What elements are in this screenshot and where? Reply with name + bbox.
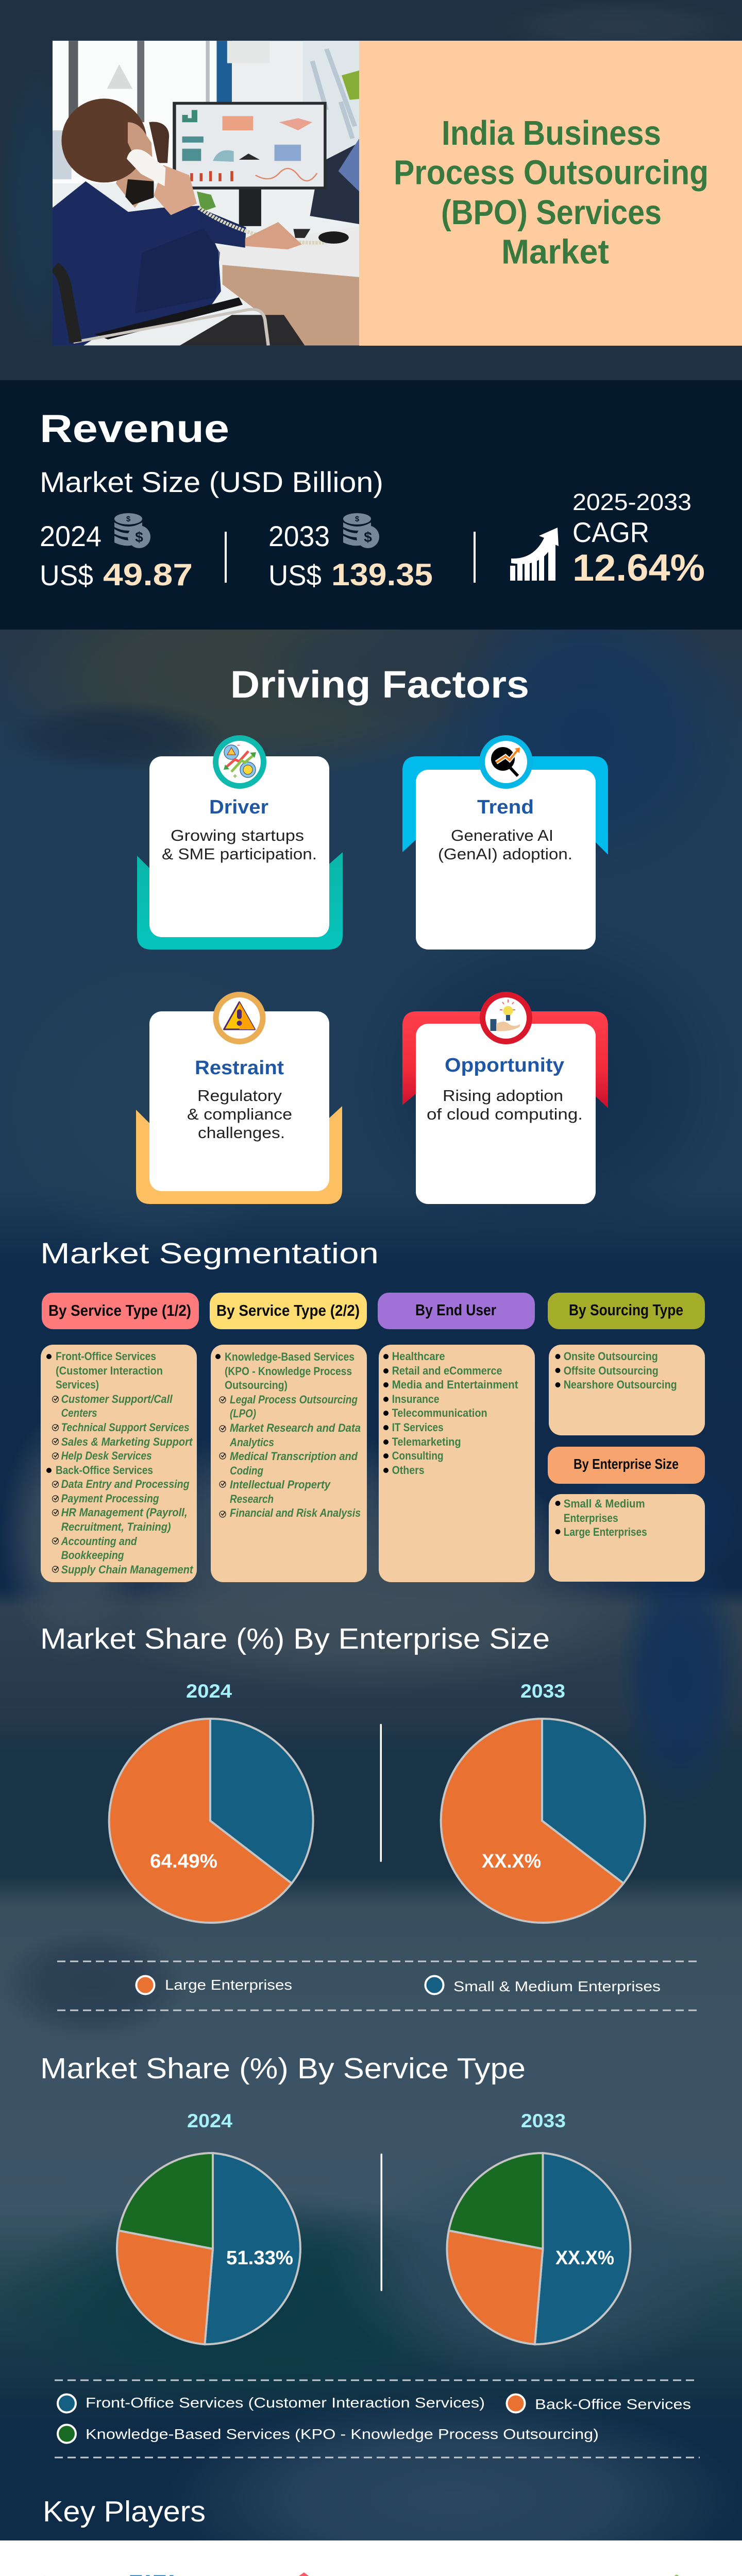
card: opportunity: Rising adoption — [443, 1087, 563, 1105]
segment list: end user: Telemarketing — [392, 1435, 461, 1448]
segment list: service type 1: Back-Office Services — [56, 1464, 153, 1477]
segment list: enterprise size: Large Enterprises — [564, 1526, 647, 1538]
year label 2033: 2033 — [521, 2110, 566, 2131]
segment list: service type 1: Front-Office Services — [56, 1350, 156, 1363]
icon: driver: − — [237, 743, 240, 749]
segment list: service type 2: Legal Process Outsourcing — [230, 1393, 358, 1406]
segment header: service type 1: By Service Type (1/2) — [48, 1301, 191, 1319]
segment list: service type 1: Recruitment, Training) — [61, 1520, 171, 1533]
segment header: end user — [378, 1293, 535, 1329]
card: trend: Trend — [477, 796, 534, 818]
segment list: end user: IT Services — [392, 1421, 444, 1434]
card: opportunity — [402, 992, 608, 1204]
segment list: end user — [379, 1345, 535, 1582]
card: restraint — [136, 992, 342, 1204]
year label 2024: 2024 — [187, 2110, 232, 2131]
title: Process Outsourcing — [394, 154, 709, 192]
segment list: service type 1: Services) — [56, 1378, 99, 1391]
icon: trend — [491, 747, 520, 776]
photo: man on phone at office desk — [53, 41, 359, 348]
segment list: enterprise size: Small & Medium — [564, 1497, 645, 1510]
segment list: end user: Media and Entertainment — [392, 1378, 518, 1391]
stat: 2024: 2024 — [40, 520, 102, 552]
stat: 2033: US$ — [268, 559, 322, 591]
segment list: service type 1: Technical Support Services — [61, 1421, 190, 1434]
segment list: service type 1: Data Entry and Processing — [61, 1478, 190, 1490]
stat: CAGR: CAGR — [572, 516, 649, 548]
segment list: service type 2: Research — [230, 1493, 274, 1505]
panel: market share by enterprise size — [40, 1622, 700, 2010]
stat: 2033: 139.35 — [331, 557, 433, 592]
legend: service type: Front-Office Services (Customer Interaction Services) — [86, 2395, 485, 2411]
legend: service type: Knowledge-Based Services (KPO - Knowledge Process Outsourcing) — [86, 2426, 599, 2442]
segment header: service type 2: By Service Type (2/2) — [216, 1301, 360, 1319]
heading: revenue: Revenue — [40, 407, 229, 451]
segment list: service type 2: Outsourcing) — [225, 1379, 288, 1392]
segment list: end user: Retail and eCommerce — [392, 1364, 502, 1377]
legend: service type: Back-Office Services — [535, 2396, 691, 2412]
icon: coins: $ — [126, 515, 131, 523]
card: trend: (GenAI) adoption. — [438, 845, 572, 863]
icon: coins — [343, 513, 379, 548]
segment list: enterprise size: Enterprises — [564, 1512, 618, 1524]
stat: 2024 — [40, 513, 193, 592]
segment list: service type 1: Accounting and — [61, 1535, 137, 1548]
pie chart: enterprise size 2024 — [109, 1719, 313, 1923]
card: trend — [402, 735, 608, 950]
segment list: service type 1: Help Desk Services — [61, 1449, 152, 1462]
segment list: sourcing type: Onsite Outsourcing — [564, 1350, 658, 1363]
pie chart: service type 2024 — [117, 2153, 300, 2344]
segment list: sourcing type: Offsite Outsourcing — [564, 1364, 659, 1377]
pie chart: enterprise size 2024: 64.49% — [150, 1851, 217, 1872]
stat: CAGR: 12.64% — [572, 547, 705, 589]
segment list: end user: Insurance — [392, 1393, 440, 1405]
year label 2024: 2024 — [186, 1681, 232, 1702]
card: driver: Driver — [209, 796, 268, 818]
segment list: service type 2: Medical Transcription and — [230, 1450, 358, 1463]
segment header: end user: By End User — [415, 1301, 496, 1319]
segment list: sourcing type — [549, 1345, 705, 1435]
card: restraint: Regulatory — [197, 1087, 282, 1105]
segment header: sourcing type: By Sourcing Type — [569, 1301, 683, 1319]
icon: coins — [114, 513, 150, 548]
panel: revenue — [0, 380, 742, 630]
heading: service type share: Market Share (%) By Service Type — [40, 2052, 526, 2085]
panel: hero — [53, 41, 742, 348]
icon: driver: + — [233, 772, 237, 780]
segment list: service type 1 — [41, 1345, 197, 1582]
subheading: market size: Market Size (USD Billion) — [40, 466, 383, 498]
logo: genpact — [284, 2572, 431, 2576]
segment list: service type 1: Customer Support/Call — [61, 1393, 173, 1405]
pie chart: service type 2024: 51.33% — [226, 2247, 293, 2269]
segment list: end user: Telecommunication — [392, 1406, 487, 1419]
legend: enterprise size: Large Enterprises — [165, 1977, 292, 1993]
segment header: enterprise size: By Enterprise Size — [574, 1456, 679, 1472]
segment list: service type 1: Supply Chain Management — [61, 1563, 194, 1576]
segment list: service type 2: (LPO) — [230, 1407, 256, 1420]
panel: key players — [0, 2495, 742, 2576]
title: Market — [501, 233, 609, 272]
card: restraint: & compliance — [187, 1105, 292, 1123]
segment list: service type 1: Payment Processing — [61, 1492, 159, 1505]
icon: growth chart arrow — [510, 528, 559, 581]
heading: enterprise size share: Market Share (%) By Enterprise Size — [40, 1622, 550, 1655]
heading: key players: Key Players — [43, 2495, 206, 2528]
segment list: service type 2: Coding — [230, 1464, 263, 1477]
segment list: service type 1: Centers — [61, 1406, 97, 1419]
title: (BPO) Services — [441, 193, 662, 232]
segment header: sourcing type — [548, 1293, 705, 1329]
stat: 2033: 2033 — [268, 520, 330, 552]
segment list: end user: Consulting — [392, 1449, 444, 1462]
segment list: enterprise size — [549, 1494, 705, 1582]
legend: service type — [58, 2395, 691, 2443]
panel: market segmentation — [40, 1237, 705, 1582]
segment list: service type 2: Knowledge-Based Services — [225, 1350, 355, 1363]
segment list: end user: Healthcare — [392, 1350, 445, 1363]
pie chart: service type 2033: XX.X% — [555, 2247, 614, 2269]
card: driver: & SME participation. — [162, 845, 317, 863]
segment list: service type 1: (Customer Interaction — [56, 1364, 163, 1377]
segment header: service type 2 — [210, 1293, 367, 1329]
title — [394, 114, 709, 272]
stat: 2033 — [268, 513, 433, 592]
pie chart: service type 2033 — [447, 2153, 630, 2344]
title panel — [359, 41, 742, 346]
segment list: service type 2 — [211, 1345, 367, 1582]
title: India Business — [442, 114, 661, 152]
segment list: service type 2: Intellectual Property — [230, 1478, 331, 1491]
icon: warning triangle — [224, 1002, 255, 1029]
icon: hand with bulb — [491, 999, 520, 1031]
segment list: service type 2: Analytics — [229, 1436, 274, 1449]
stat: CAGR: 2025-2033 — [572, 489, 692, 515]
segment list: service type 2: Market Research and Data — [230, 1421, 361, 1434]
stat: CAGR — [572, 489, 705, 589]
pie chart: enterprise size 2033: XX.X% — [482, 1851, 541, 1872]
card: trend: Generative AI — [451, 826, 553, 844]
segment list: sourcing type: Nearshore Outsourcing — [564, 1378, 677, 1391]
icon: driver — [224, 743, 256, 780]
heading: driving factors: Driving Factors — [230, 663, 529, 706]
segment list: service type 1: Bookkeeping — [61, 1549, 124, 1562]
card: opportunity: Opportunity — [445, 1055, 564, 1076]
card: opportunity: of cloud computing. — [427, 1105, 583, 1123]
stat: 2024: 49.87 — [103, 557, 193, 592]
segment list: service type 1: Sales & Marketing Support — [61, 1435, 193, 1448]
legend: enterprise size: Small & Medium Enterprises — [453, 1978, 661, 1994]
panel: driving factors — [136, 663, 608, 1204]
pie chart: enterprise size 2033 — [441, 1719, 645, 1923]
segment list: service type 2: (KPO - Knowledge Process — [225, 1365, 352, 1378]
segment header: enterprise size — [548, 1447, 705, 1484]
segment list: service type 1: HR Management (Payroll, — [61, 1506, 188, 1519]
icon: coins: $ — [364, 529, 372, 545]
card: driver: Growing startups — [171, 826, 304, 844]
icon: coins: $ — [135, 529, 143, 545]
card: driver — [137, 735, 343, 950]
segment header: service type 1 — [42, 1293, 199, 1329]
segment list: end user: Others — [392, 1464, 425, 1477]
icon: coins: $ — [355, 515, 360, 523]
year label 2033: 2033 — [520, 1681, 565, 1702]
panel: market share by service type — [40, 2052, 700, 2458]
segment list: service type 2: Financial and Risk Analysis — [230, 1506, 361, 1519]
stat: 2024: US$ — [40, 559, 93, 591]
heading: market segmentation: Market Segmentation — [40, 1237, 379, 1270]
legend: enterprise size — [136, 1976, 661, 1994]
card: restraint: challenges. — [198, 1124, 285, 1142]
card: restraint: Restraint — [195, 1057, 284, 1079]
